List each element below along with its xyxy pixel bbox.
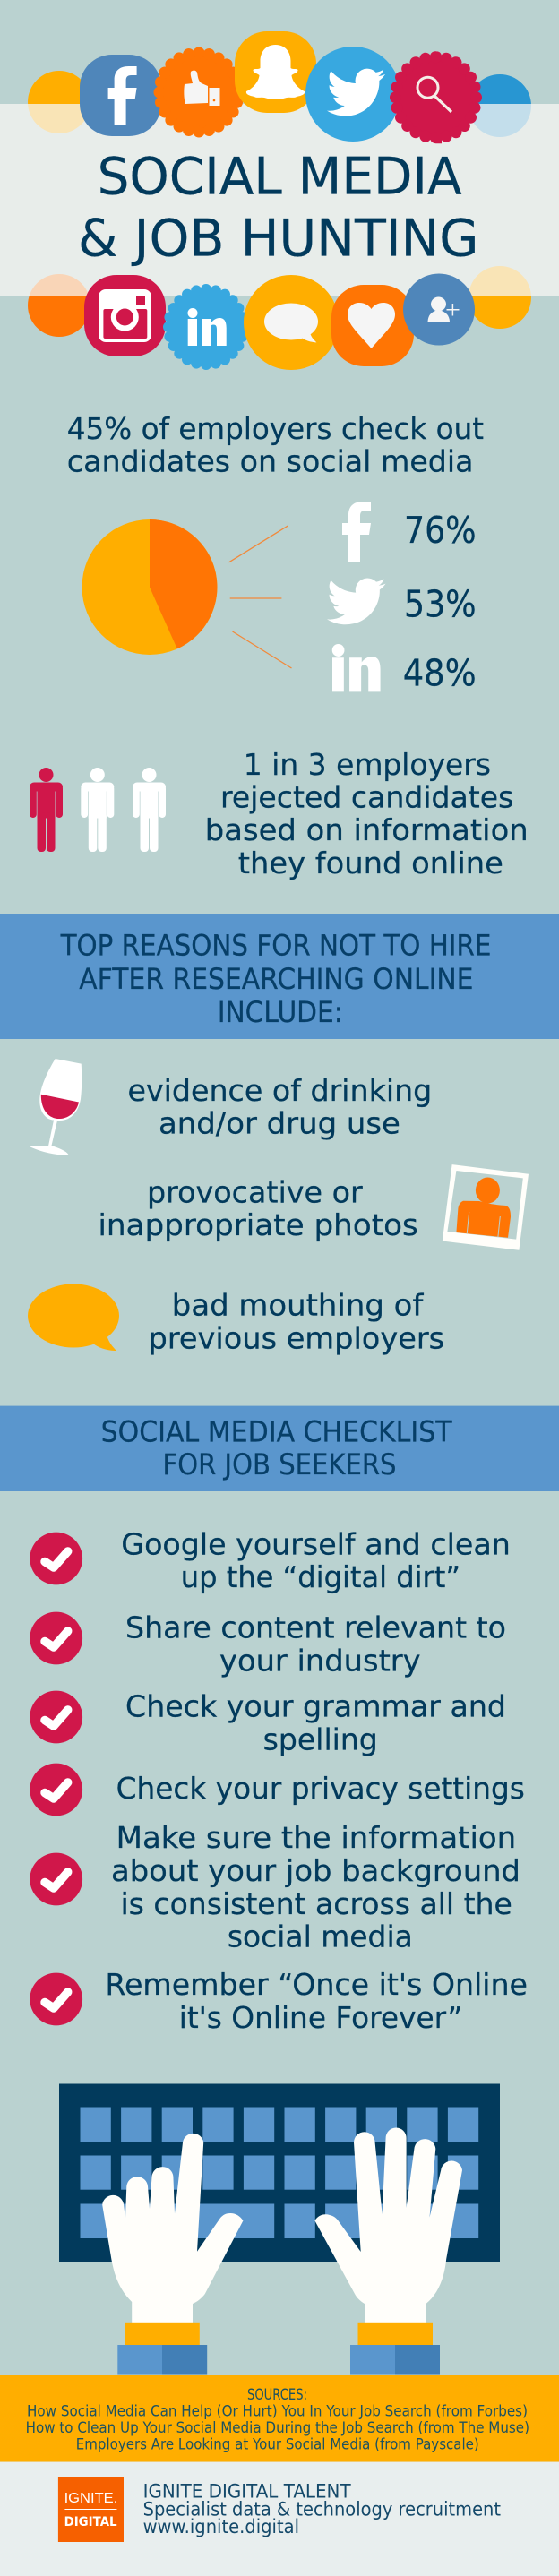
text: bad mouthing: previous employers [149,1321,444,1355]
banner: checklist: SOCIAL MEDIA CHECKLIST [101,1414,452,1448]
text: drinking [127,1074,432,1141]
text: drinking: evidence of drinking [127,1074,432,1108]
check item 3: spelling [263,1723,378,1757]
check item 5: social media [228,1919,413,1953]
logo: ignite digital: IGNITE. [64,2491,117,2506]
heading: 45% of employers: candidates on social media [67,444,474,478]
text: photos: provocative or [147,1176,363,1210]
heading: 45% of employers: 45% of employers check out [67,412,484,446]
panel: header [0,31,559,370]
text: company details [143,2481,501,2537]
connector lines [229,526,292,668]
check item 1: up the “digital dirt” [181,1560,460,1594]
keyboard [59,2083,500,2262]
banner: top reasons: TOP REASONS FOR NOT TO HIRE [60,929,491,963]
panel: reasons [28,1059,529,1355]
panel: employer social media statistics [67,412,484,695]
check item 5: Make sure the information [116,1821,516,1855]
text: bad mouthing [149,1288,444,1355]
logo: ignite digital [58,2477,124,2542]
stat: facebook 76%: 76% [404,509,477,552]
text: company details: www.ignite.digital [143,2516,299,2537]
banner: checklist: FOR JOB SEEKERS [163,1447,396,1481]
text: rejected candidates: they found online [238,846,503,880]
text: photos: inappropriate photos [98,1208,418,1242]
panel: checklist [30,1527,528,2035]
check item 4 [30,1764,525,1816]
icon: snapchat [235,31,316,113]
banner: checklist [0,1406,559,1491]
pie chart: 45% [82,519,217,655]
faded circles behind band [0,71,559,337]
icon: add user [403,274,475,346]
icon: speech bubble [28,1284,119,1351]
check item 2: your industry [219,1644,421,1678]
icon: three people [30,768,166,852]
check item 6 [30,1968,528,2035]
panel: sources [0,2375,559,2462]
illustration: keyboard and hands [59,2083,500,2375]
check item 3: Check your grammar and [125,1690,506,1724]
icon: heart [331,285,414,366]
check item 1: Google yourself and clean [121,1527,511,1561]
icon: wine glass [30,1059,82,1155]
icon: twitter [305,47,400,142]
check item 5: about your job background [111,1854,520,1888]
left hand [102,2134,243,2375]
title: SOCIAL MEDIA [98,148,462,207]
stat: twitter 53%: 53% [404,583,477,626]
check item 4: Check your privacy settings [116,1772,525,1806]
panel: sources: SOURCES: [247,2386,307,2403]
icon: chat bubble [244,275,339,370]
right hand [314,2128,462,2375]
icon: thumbs up badge [159,53,238,132]
heading: 45% of employers [67,412,484,478]
icon: linkedin white [332,644,381,691]
icon: instagram [84,275,166,356]
check item 6: it's Online Forever” [179,2001,463,2035]
title [78,148,478,269]
banner: top reasons: AFTER RESEARCHING ONLINE [79,962,474,996]
panel: footer [0,2462,559,2576]
banner: top reasons: INCLUDE: [218,995,343,1029]
icon: facebook [80,55,161,136]
text: rejected candidates [205,748,529,880]
text: rejected candidates: 1 in 3 employers [244,748,491,782]
text: company details: IGNITE DIGITAL TALENT [143,2481,351,2503]
icon: search badge [396,57,477,138]
check item 1 [30,1527,511,1594]
text: rejected candidates: rejected candidates [220,780,513,814]
text: company details: Specialist data & technology recruitment [143,2498,501,2520]
icon: photo print [443,1164,529,1250]
panel: sources: Employers Are Looking at Your Social Media (from Payscale) [76,2436,479,2453]
icon: twitter white [327,579,386,624]
banner: top reasons [0,914,559,1039]
text: drinking: and/or drug use [159,1107,400,1141]
panel: sources: How Social Media Can Help (Or Hurt) You In Your Job Search (from Forbes) [27,2402,528,2420]
logo: ignite digital: DIGITAL [64,2515,117,2529]
check item 5: is consistent across all the [120,1887,512,1921]
icon: linkedin badge [168,289,244,365]
icon: facebook white [342,502,371,562]
text: rejected candidates: based on information [205,813,529,847]
check item 6: Remember “Once it's Online [105,1968,528,2002]
check item 3 [30,1690,506,1757]
stat: linkedin 48%: 48% [403,652,477,695]
text: bad mouthing: bad mouthing of [172,1288,425,1322]
check item 5 [30,1821,520,1953]
check item 2 [30,1611,506,1678]
text: photos [98,1176,418,1242]
check item 2: Share content relevant to [125,1611,506,1645]
title: & JOB HUNTING [78,210,478,269]
panel: 1 in 3 employers [30,748,529,880]
